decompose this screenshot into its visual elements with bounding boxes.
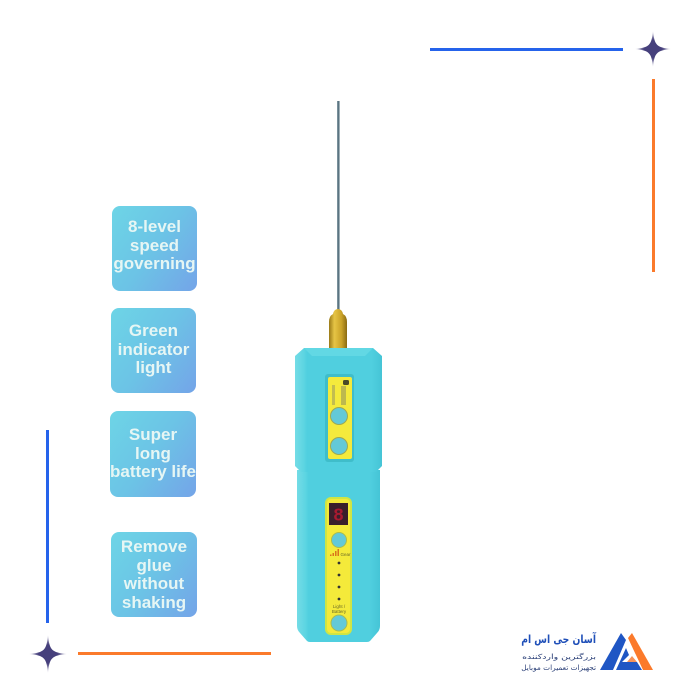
lower control panel [325,497,352,635]
gear label [330,549,351,557]
logo: tagline line 2: تجهیزات تعمیرات موبایل [521,664,596,672]
light button [331,615,347,631]
card: 8-level speed governing [112,206,197,291]
device: glue removal tool: Battery [332,609,347,614]
card: remove glue without shaking: without [124,574,184,593]
card: remove glue without shaking [111,532,197,617]
icon: bottom left sparkle star [30,636,66,672]
device: glue removal tool: 8 [333,506,344,526]
card: remove glue without shaking: shaking [122,593,186,612]
upper control panel [325,374,354,462]
lower body [297,470,380,642]
card: 8-level speed governing: speed [130,236,179,255]
card: 8-level speed governing: governing [113,254,196,273]
light and battery label: Light / [333,604,346,609]
card: super long battery life: long [135,444,171,463]
device: glue removal tool [295,101,382,642]
card: green indicator light: Green [129,321,178,340]
bottom orange line [78,652,271,655]
gold collar [329,309,347,349]
card: remove glue without shaking: glue [137,556,171,575]
card: 8-level speed governing: 8-level [128,217,181,236]
needle [337,101,340,311]
card: remove glue without shaking: Remove [121,537,187,556]
logo: triangle mark [600,633,653,670]
upper body [295,348,382,472]
indicator dots [338,562,340,564]
card: green indicator light: light [136,358,171,377]
right orange line [652,79,655,272]
digital display [329,503,348,525]
card: super long battery life: Super [129,425,177,444]
left blue line [46,430,49,623]
card: green indicator light [111,308,196,393]
top blue line [430,48,623,51]
card: green indicator light: indicator [118,340,189,359]
gear label: Gear [340,552,351,557]
card: super long battery life [110,411,196,497]
logo: brand name: آسان جی اس ام [521,632,596,646]
icon: top right sparkle star [636,32,670,66]
speed button [332,532,346,548]
logo: tagline line 1: بزرگترین واردکننده [522,653,596,661]
card: super long battery life: battery life [110,462,196,481]
